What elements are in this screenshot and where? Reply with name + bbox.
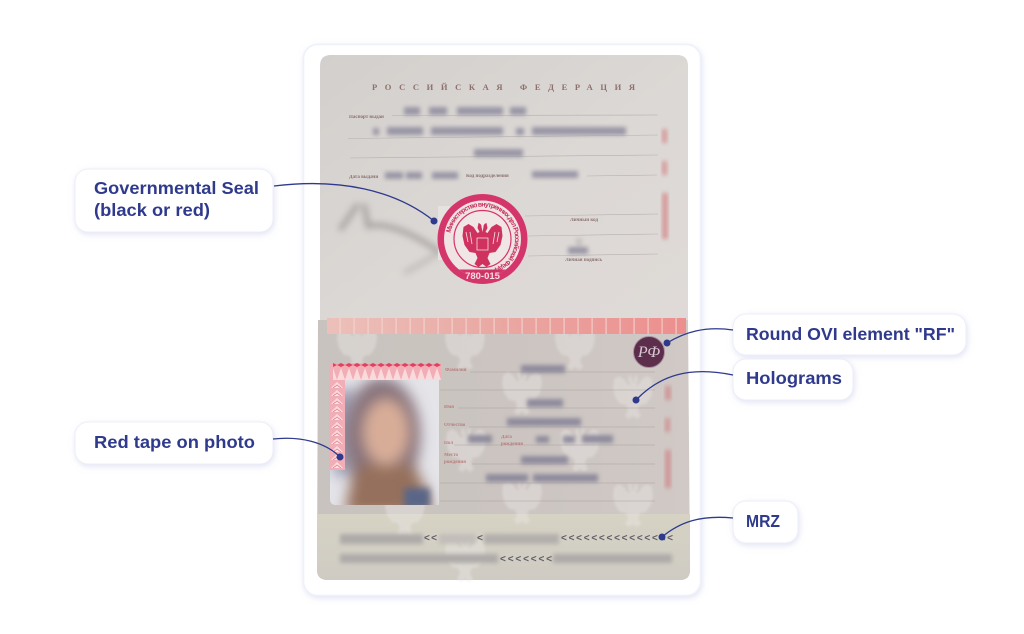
form captions: Паспорт выдан	[349, 115, 384, 120]
MRZ lines: <<	[424, 533, 437, 544]
form captions: Личный код	[570, 218, 599, 223]
printed form lines	[348, 115, 658, 256]
seal code: 780-015	[465, 271, 501, 282]
pink perforated strip	[327, 318, 686, 334]
red side marks	[662, 129, 668, 239]
MRZ lines: <<<<<<<<<<<<<<<	[561, 533, 673, 544]
heading: Russian Federation: РОССИЙСКАЯ ФЕДЕРАЦИЯ	[372, 82, 635, 92]
callout: governmental seal: (black or red)	[94, 200, 210, 220]
MRZ band	[317, 514, 690, 580]
callout: red tape on photo	[75, 422, 344, 464]
form captions: Дата выдачи	[349, 175, 378, 180]
round OVI element RF: РФ	[637, 344, 660, 361]
field captions: Отчество	[444, 423, 466, 428]
passport	[317, 55, 690, 580]
callout: holograms: Holograms	[746, 368, 842, 388]
form lines	[440, 372, 655, 501]
field captions	[444, 368, 523, 465]
blurred photo	[330, 380, 439, 505]
field captions: Имя	[444, 405, 454, 410]
callout: MRZ	[658, 501, 798, 543]
eagle watermarks	[337, 326, 653, 582]
form captions: Личная подпись	[565, 258, 603, 263]
governmental seal: Министерство внутренних дел Российской Федерации	[446, 202, 520, 275]
callout: round OVI element: Round OVI element "RF"	[746, 324, 955, 344]
MRZ lines	[340, 533, 673, 565]
passport top page	[320, 55, 688, 320]
callout: round OVI element	[664, 314, 966, 355]
callout: MRZ: MRZ	[746, 511, 780, 531]
form captions	[349, 115, 603, 263]
blurred issuer fields	[373, 107, 626, 254]
callout: red tape on photo: Red tape on photo	[94, 432, 255, 452]
card	[304, 44, 700, 596]
MRZ lines: <	[477, 533, 483, 544]
field captions: Место	[444, 453, 459, 458]
field captions: Фамилия	[445, 368, 467, 373]
signature	[340, 204, 440, 273]
blurred holder fields	[468, 365, 613, 482]
round OVI element RF	[634, 336, 664, 368]
MRZ lines: <<<<<<<	[500, 554, 552, 565]
governmental seal	[438, 194, 528, 284]
field captions: рождения	[444, 460, 466, 465]
callout: governmental seal	[75, 169, 438, 232]
callout: holograms	[632, 359, 853, 404]
field captions: Дата	[501, 435, 512, 440]
red tape on photo	[329, 363, 441, 478]
form captions: Код подразделения	[466, 174, 509, 179]
field captions: рождения	[501, 442, 523, 447]
infographic	[74, 44, 969, 600]
red side marks	[665, 386, 671, 488]
passport bottom page	[317, 318, 690, 582]
callout: governmental seal: Governmental Seal	[94, 178, 259, 198]
field captions: Пол	[444, 441, 453, 446]
